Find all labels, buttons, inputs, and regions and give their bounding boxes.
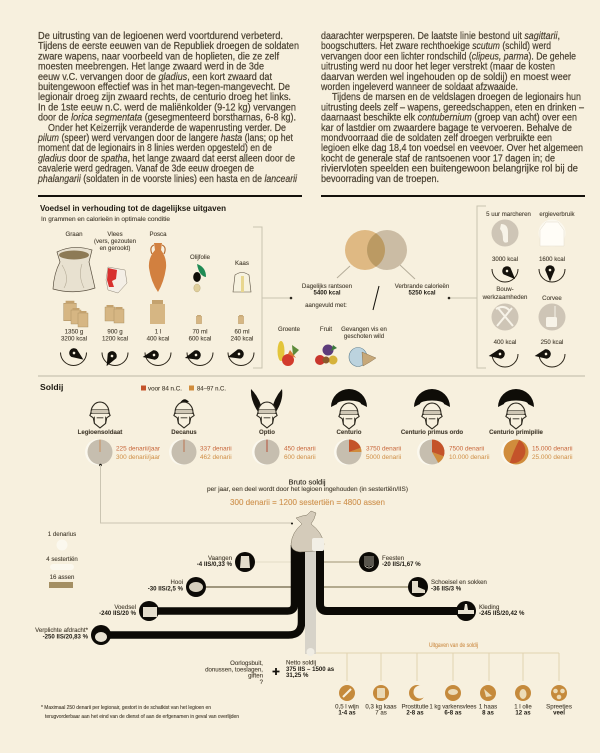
column: olive oil	[184, 254, 213, 366]
icon: weight	[238, 315, 244, 324]
column: posca: 400 kcal	[147, 336, 169, 342]
legend: coin values: 4 sestertiën	[46, 556, 78, 563]
label: net pay: 375 IIS – 1500 as	[286, 666, 335, 673]
pie: centurion pay	[334, 439, 362, 465]
node: right 1: -20 IIS/1,67 %	[382, 561, 421, 568]
node: right 3	[456, 601, 525, 621]
label: net pay	[286, 660, 335, 679]
node: left 3: -240 IIS/20 %	[99, 610, 137, 617]
text block: left column: door de lorica segmentata (gesegmenteerd borstharnas, 6-8 kg).	[38, 113, 296, 124]
expenditure: corvee	[534, 295, 566, 367]
label: other income	[205, 660, 264, 686]
arrow: food bracket to ration	[253, 227, 292, 368]
rank: centurion: Centurio	[336, 429, 362, 436]
expense: hare: 8 as	[482, 710, 495, 716]
chart: flow of pay	[35, 511, 525, 686]
panel: expenses of pay	[316, 642, 572, 716]
node: right 3: -245 IIS/20,42 %	[479, 610, 525, 617]
expenditure: marching: 5 uur marcheren	[486, 211, 531, 218]
rank: legionary	[78, 402, 161, 465]
rank: centurion: 5000 denarii	[366, 454, 401, 461]
column: cheese: Kaas	[235, 260, 249, 267]
expense: games: veel	[553, 710, 565, 716]
pie: optio pay	[252, 439, 280, 465]
text block: left column: moment dat de legionairs in 8 linies werden opgesteld) en de	[38, 143, 272, 154]
rank: legionary: Legioensoldaat	[78, 429, 122, 436]
rank: centurion primus ordo: Centurio primus ordo	[401, 429, 463, 436]
arrows: expenses	[316, 653, 559, 681]
label: burned calories	[395, 283, 449, 296]
node: left 1: Vaangen	[208, 555, 232, 562]
column: meat: 1200 kcal	[102, 336, 128, 342]
text block: right column: kar of lastdier om zwaardere bagage te vervoeren. Behalve de	[321, 123, 572, 134]
expense: oil	[514, 685, 532, 716]
icon: weights	[64, 301, 88, 327]
supplement: fruit: Fruit	[320, 326, 332, 333]
node: left 1	[197, 552, 255, 572]
node: right 1	[359, 552, 421, 572]
expenditure: construction: 400 kcal	[494, 339, 516, 346]
expense: pork: 6-8 as	[444, 710, 462, 716]
column: grain: Graan	[66, 231, 82, 238]
icon: cheese	[233, 272, 251, 292]
column: posca: 1 l	[155, 328, 161, 336]
label: other income: donussen, toeslagen,	[205, 666, 263, 674]
icon: weights	[105, 305, 124, 323]
chart: venn ration versus burned calories	[337, 230, 415, 279]
heading: pay: Soldij	[40, 382, 63, 392]
column: posca: Posca	[150, 231, 167, 238]
rank: centurion primipilus: Centurio primipilie	[489, 429, 544, 436]
rank: optio: 450 denarii	[284, 446, 316, 452]
text block: left column: phalangarii (soldaten in de voorste linies) een hasta en de lancearii	[37, 174, 298, 185]
label: daily ration: Dagelijks rantsoen	[302, 283, 352, 290]
supplement: vegetables: Groente	[278, 326, 301, 333]
icon: meat	[106, 267, 127, 293]
text block: right column: uitrusting werd nu door het leger verstrekt (maar de kosten	[321, 62, 555, 73]
column: cheese	[227, 260, 254, 366]
text block: right column: mondvoorraad die de soldaten zelf droegen verbruikte een	[321, 133, 552, 144]
expenditure: energy use: 1600 kcal	[539, 256, 565, 263]
icon: money bag	[291, 511, 324, 552]
icon: grain sack	[53, 247, 95, 292]
node: left 2	[148, 577, 206, 597]
text block: right column: daarnaast beschikte elk contubernium (groep van acht) over een	[321, 113, 577, 124]
label: net pay: 31,25 %	[286, 672, 309, 679]
rank: decanus: 462 denarii	[200, 454, 232, 461]
text block: left column: pilum (speer) werd vervangen door de langere hasta (lans; op het	[37, 133, 293, 144]
expense: hare: 1 haas	[479, 704, 497, 710]
label: net pay: Netto soldij	[286, 660, 316, 666]
gauge	[60, 346, 86, 366]
rank: centurion primus ordo: 7500 denarii	[449, 446, 484, 452]
text block: left column: In de 1ste eeuw n.C. werd de maliënkolder (9-12 kg) vervangen	[38, 102, 296, 113]
rank: optio: 600 denarii	[284, 454, 316, 461]
node: right 2: Schoeisel en sokken	[431, 579, 487, 586]
heading: gross pay	[207, 478, 408, 507]
heading: gross pay: Bruto soldij	[288, 478, 326, 486]
node: right 3: Kleding	[479, 604, 499, 611]
rank: legionary: 225 denarii/jaar	[116, 446, 161, 452]
node: left 4: Verplichte afdracht*	[35, 627, 89, 634]
expenditure: construction: Bouw-	[496, 286, 514, 293]
footnote	[41, 705, 239, 720]
supplement: fish and game: geschoten wild	[344, 333, 384, 340]
column: olive oil: Olijfolie	[190, 254, 211, 261]
rank: centurion primipilus: 15.000 denarii	[532, 446, 573, 452]
pie: primus ordo pay	[417, 439, 445, 465]
expense: pork: 1 kg varkensvlees	[430, 704, 476, 710]
legend: coin values: 16 assen	[50, 574, 74, 581]
text block: left column: cavalerie werd gedragen. Vanaf de 3de eeuw droegen de	[38, 164, 254, 175]
legend: voor 84 n.C.	[148, 386, 182, 392]
expenditure: energy use: ergieverbruik	[539, 211, 576, 218]
node: left 3	[99, 601, 159, 621]
slash	[373, 286, 379, 310]
expense: cheese: 0,3 kg kaas	[365, 704, 397, 710]
expense: oil: 1 l olie	[514, 704, 532, 710]
gauge	[142, 349, 171, 366]
label: burned calories: Verbrande calorieën	[395, 283, 449, 290]
icon: weight	[196, 315, 202, 324]
heading: gross pay: 300 denarii = 1200 sestertiën = 4800 assen	[230, 497, 385, 507]
column: meat: (vers, gezouten	[94, 238, 136, 245]
column: meat: 900 g	[107, 328, 123, 336]
panel: pay	[35, 382, 573, 720]
expenditure: construction: werkzaamheden	[482, 294, 527, 301]
expense: hare	[479, 685, 497, 716]
label: other income: Oorlogsbuit,	[230, 660, 263, 667]
arrow: legionary pay to gross pay	[99, 464, 293, 524]
icon: plus	[272, 668, 280, 675]
label: daily ration	[302, 283, 352, 296]
text block: right column: riviervloten speelden een buitengewoon belangrijke rol bij de	[321, 164, 578, 175]
expense: cheese	[365, 685, 397, 716]
column: grain: 1350 g	[65, 328, 83, 336]
expense: cheese: 7 as	[375, 710, 387, 716]
gauge	[184, 349, 213, 366]
footnote: * Maximaal 250 denarii per legionair, gestort in de schatkist van het legioen en	[41, 705, 211, 711]
icon: olives	[193, 264, 206, 292]
node: left 2: Hooi	[170, 579, 183, 586]
node: left 4: -250 IIS/20,83 %	[43, 634, 89, 640]
thick branches	[100, 545, 466, 635]
rank: centurion primipilus: 25.000 denarii	[532, 454, 573, 461]
text block: right column: daarachter werpsperen. De laatste linie bestond uit sagittarii,	[321, 31, 560, 42]
subheading: food: In grammen en calorieën in optimale conditie	[41, 216, 171, 223]
gauge	[102, 350, 128, 368]
gauge	[227, 348, 254, 366]
column: olive oil: 600 kcal	[189, 336, 211, 342]
expenditure: construction	[482, 286, 527, 367]
text block: right column: vervangen door een lichter rondschild (clipeus, parma). De gehele	[321, 51, 576, 62]
icon: weight	[150, 300, 165, 324]
text block: left column: zware wapens, naar voorbeeld van de hoplieten, die ze zelf	[38, 51, 279, 62]
column: meat: en gerookt)	[100, 245, 130, 252]
legend: coin values	[46, 531, 78, 588]
expense: prostitution: 2-8 as	[406, 710, 424, 716]
rank: legionary: 300 denarii/jaar	[116, 454, 161, 461]
column: posca	[142, 231, 171, 366]
text block: right column: kocht de generale staf de rantsoenen voor 17 dagen in; de	[321, 153, 555, 164]
legend: 84–97 n.C.	[197, 386, 226, 392]
text block: left column: Onder het Keizerrijk veranderde de wapenrusting verder. De	[48, 123, 286, 134]
text block: right column	[320, 31, 584, 185]
rank: centurion	[331, 389, 401, 465]
pie: primipilus pay	[501, 439, 528, 465]
icon: amphora	[149, 243, 166, 292]
expense: oil: 12 as	[515, 710, 531, 716]
heading: food: Voedsel in verhouding tot de dagelijkse uitgaven	[40, 203, 226, 213]
rank: centurion: 3750 denarii	[366, 446, 401, 452]
text block: right column: daarvan werden wel ingehouden op de soldij) en moest weer	[321, 72, 572, 83]
footnote: terugvorderbaar aan het eind van de dienst of aan de erfgenamen in geval van overlijden	[45, 714, 239, 720]
arrow: expenditure bracket to burned calories	[448, 206, 486, 368]
supplement: vegetables	[278, 326, 301, 366]
node: right 1: Feesten	[382, 555, 404, 562]
thin branches	[206, 562, 410, 587]
text block: right column: boogschutters. Het zware rechthoekige scutum (schild) werd	[321, 41, 551, 52]
pie: decanus pay	[169, 439, 196, 465]
expense: games	[546, 685, 572, 716]
rank: centurion primus ordo: 10.000 denarii	[449, 454, 490, 461]
supplement: fish and game: Gevangen vis en	[341, 326, 387, 333]
column: grain: 3200 kcal	[61, 336, 87, 342]
supplement: fruit	[315, 326, 338, 365]
column: olive oil: 70 ml	[193, 328, 207, 336]
expenditure: corvee: Corvee	[542, 295, 562, 302]
legend	[141, 386, 226, 392]
rank: decanus	[169, 399, 232, 465]
heading: expenses: Uitgaven van de soldij	[429, 642, 478, 649]
column: meat	[94, 231, 136, 368]
text block: left column: legionair droeg zijn zwaard rechts, de centurio droeg het links.	[38, 92, 291, 103]
node: left 4	[35, 625, 111, 645]
expense: wine: 0,5 l wijn	[335, 704, 359, 710]
expense: pork	[430, 685, 476, 716]
rank: decanus: 337 denarii	[200, 446, 232, 452]
node: right 2: -36 IIS/3 %	[431, 586, 462, 592]
node: left 1: -4 IIS/0,33 %	[197, 561, 233, 568]
text block: left column: Tijdens de eerste eeuwen van de Republiek droegen de soldaten	[38, 41, 299, 52]
heading: gross pay: per jaar, een deel wordt door het legioen ingehouden (in sestertiën/IIS)	[207, 486, 408, 493]
column: grain	[53, 231, 95, 366]
expense: games: Spreetjes	[546, 704, 572, 710]
node: right 2	[408, 577, 487, 597]
net pay bar	[305, 540, 316, 656]
text block: left column: gladius door de spatha, het lange zwaard dat eerst alleen door de	[38, 153, 295, 164]
expense: prostitution	[401, 685, 429, 716]
label: daily ration: 5400 kcal	[313, 290, 341, 296]
label: supplemented with: aangevuld met:	[305, 302, 347, 309]
column: cheese: 60 ml	[235, 328, 249, 336]
pie: legionary pay	[85, 439, 112, 465]
rank: centurion primipilus	[489, 389, 573, 465]
text block: right column: bevoorrading van de troepen.	[321, 174, 439, 185]
column: cheese: 240 kcal	[231, 336, 253, 342]
expenditure: marching	[486, 211, 531, 283]
label: other income: ?	[260, 679, 264, 686]
expenditure: marching: 3000 kcal	[492, 256, 518, 263]
label: other income: giften	[248, 672, 263, 680]
text block: right column: worden ingeleverd wanneer de soldaat afzwaaide.	[320, 82, 518, 93]
rank: centurion primus ordo	[401, 389, 490, 465]
supplement: fish and game	[341, 326, 387, 366]
panel: food versus daily expenditure	[40, 203, 576, 368]
node: left 2: -30 IIS/2,5 %	[148, 586, 184, 592]
column: meat: Vlees	[107, 231, 123, 238]
text block: left column: buitengewoon effectief was in het man-tegen-mangevecht. De	[38, 82, 290, 93]
expense: prostitution: Prostitutie	[401, 704, 429, 710]
expense: wine	[335, 685, 359, 716]
label: burned calories: 5250 kcal	[408, 290, 436, 296]
text block: left column: De uitrusting van de legioenen werd voortdurend verbeterd.	[38, 31, 283, 42]
expenditure: corvee: 250 kcal	[541, 339, 563, 346]
rank: decanus: Decanus	[171, 429, 197, 436]
expenditure: energy use	[538, 211, 576, 282]
text block: left column	[37, 31, 299, 185]
legend: coin values: 1 denarius	[48, 531, 76, 538]
expense: wine: 1-4 as	[338, 710, 356, 716]
node: left 3: Voedsel	[114, 604, 136, 611]
rank: optio: Optio	[259, 429, 275, 436]
text block: left column: eeuw v.C. vervangen door de gladius, een kort zwaard dat	[38, 72, 272, 83]
text block: left column: moesten meebrengen. Het lange zwaard werd in de 3de	[38, 62, 264, 73]
rank: optio	[251, 389, 316, 465]
